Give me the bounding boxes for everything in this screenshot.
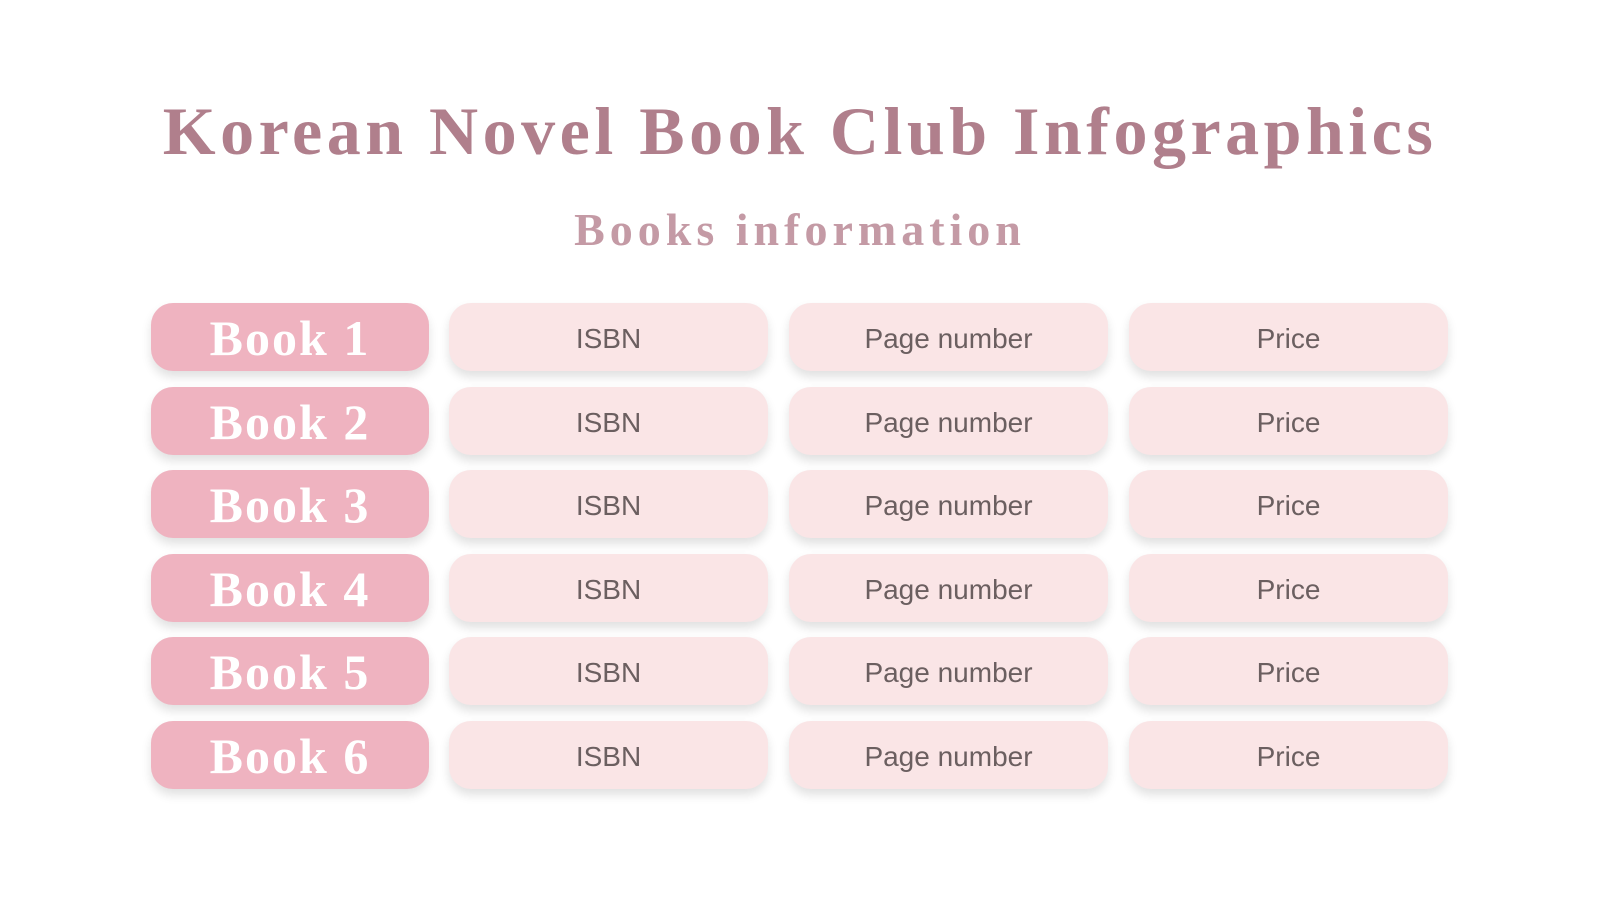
table: Page number [864, 740, 1033, 772]
table: Book 5 [210, 644, 370, 700]
table: Price [1257, 740, 1320, 772]
table: Book 4 [210, 561, 370, 617]
row 3 [148, 470, 1451, 547]
table: Page number [864, 656, 1033, 688]
row 2 [148, 387, 1451, 464]
table: Price [1257, 322, 1320, 354]
table: Page number [864, 322, 1033, 354]
subtitle: Books information [574, 204, 1026, 255]
table: Price [1257, 406, 1320, 438]
table: ISBN [576, 490, 641, 520]
row 1 [148, 303, 1451, 380]
row 5 [148, 637, 1451, 714]
row 4 [148, 554, 1451, 631]
table: ISBN [576, 656, 641, 688]
table: ISBN [576, 322, 641, 354]
title: Korean Novel Book Club Infographics [163, 93, 1437, 169]
table: ISBN [576, 574, 641, 604]
table: Book 2 [210, 394, 370, 450]
table: ISBN [576, 740, 641, 772]
table: Price [1257, 574, 1320, 604]
table: Price [1257, 490, 1320, 520]
row 6 [148, 721, 1451, 798]
table: Book 1 [210, 310, 370, 366]
table: Page number [864, 574, 1033, 604]
table: Price [1257, 656, 1320, 688]
table: Book 3 [210, 477, 370, 533]
table: Page number [864, 490, 1033, 520]
table: Book 6 [210, 728, 370, 784]
table: ISBN [576, 406, 641, 438]
table: Page number [864, 406, 1033, 438]
